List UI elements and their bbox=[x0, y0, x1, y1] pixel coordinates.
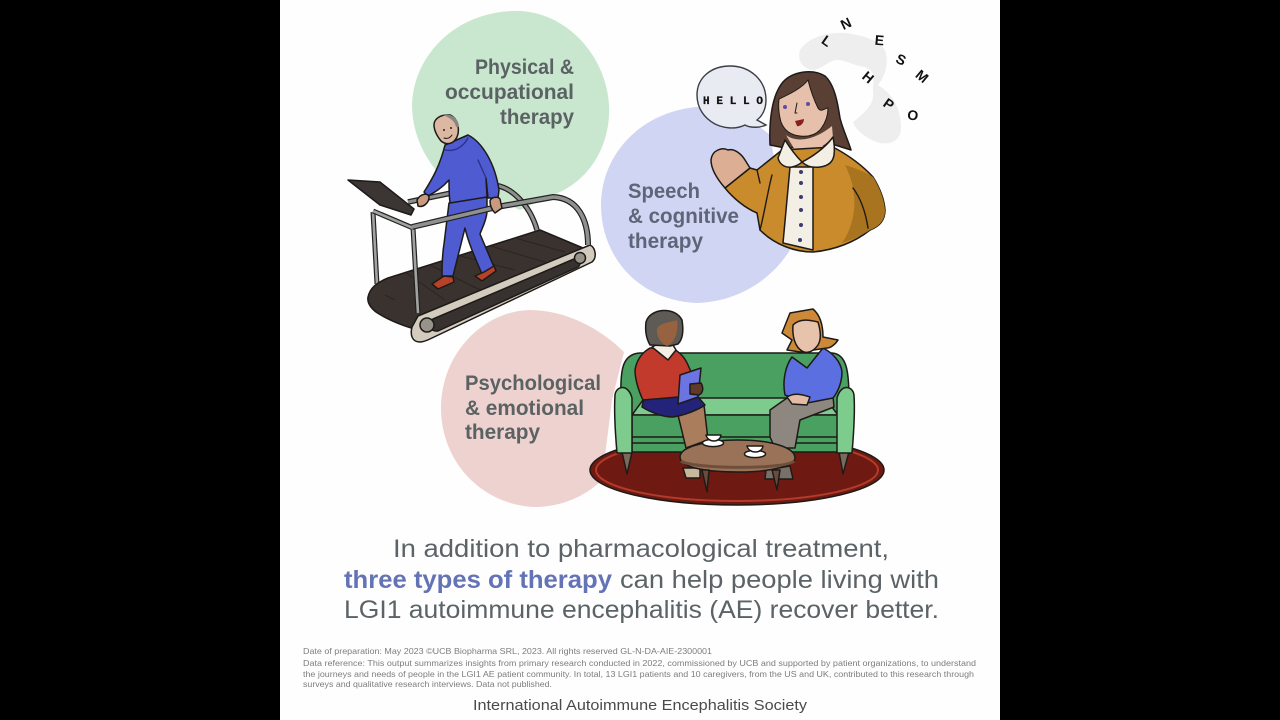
therapist sweater bbox=[635, 348, 697, 400]
treadmill far post bbox=[373, 212, 377, 284]
scattered letters bbox=[819, 14, 932, 124]
client face bbox=[793, 320, 820, 352]
blob: psychological therapy pink circle bbox=[441, 310, 624, 507]
sofa seat bbox=[632, 398, 838, 415]
scattered letters: P bbox=[880, 95, 897, 113]
illustration: therapy session on sofa bbox=[590, 309, 884, 505]
woman face bbox=[779, 80, 828, 136]
speech fog cloud bbox=[799, 33, 901, 143]
heading: psychological and emotional therapy: therapy bbox=[465, 421, 540, 444]
man left hand bbox=[417, 194, 429, 206]
treadmill near post and crossbar bbox=[373, 211, 418, 313]
treadmill side frame bbox=[411, 245, 595, 342]
scattered letters: N bbox=[838, 14, 854, 33]
woman buttons bbox=[798, 170, 803, 242]
therapist hand bbox=[690, 383, 703, 395]
treadmill belt bbox=[368, 230, 590, 330]
client legs bbox=[770, 396, 834, 448]
man right hand bbox=[490, 197, 502, 213]
treadmill far rail bbox=[408, 185, 537, 230]
sofa arms bbox=[615, 388, 632, 453]
rug bbox=[590, 435, 884, 505]
heading: speech and cognitive therapy: Speech bbox=[628, 180, 700, 203]
woman hair bbox=[770, 72, 851, 150]
heading: psychological and emotional therapy: & emotional bbox=[465, 397, 584, 420]
scattered letters: O bbox=[906, 106, 920, 124]
footnotes bbox=[303, 646, 976, 689]
scattered letters: H bbox=[859, 68, 877, 87]
heading: psychological and emotional therapy bbox=[465, 372, 601, 444]
man legs bbox=[442, 196, 494, 276]
woman eyes and mouth bbox=[783, 102, 810, 126]
main statement: three types of therapy bbox=[344, 566, 612, 594]
woman cardigan bbox=[725, 147, 885, 252]
heading: physical and occupational therapy: Physical & bbox=[475, 56, 574, 79]
man hoodie bbox=[424, 135, 499, 203]
client feet bbox=[765, 466, 793, 479]
treadmill console bbox=[348, 180, 414, 215]
heading: physical and occupational therapy: occupational bbox=[445, 81, 574, 104]
therapist skirt bbox=[642, 390, 705, 417]
man shoes bbox=[432, 276, 454, 289]
treadmill rollers bbox=[420, 318, 434, 332]
footnotes: Data reference: This output summarizes insights from primary research conducted in 2022, commissioned by UCB and supported by patient organizations, to understand bbox=[303, 658, 976, 668]
sofa legs bbox=[622, 452, 849, 474]
blob: speech therapy lilac circle bbox=[601, 107, 790, 303]
clipboard bbox=[678, 368, 701, 404]
woman collar bbox=[778, 137, 834, 167]
therapist head bbox=[646, 310, 683, 346]
scattered letters: S bbox=[893, 50, 909, 69]
therapist shirt collar bbox=[652, 345, 676, 360]
illustration: woman speaking with word fog bbox=[697, 14, 932, 252]
client sweater bbox=[784, 348, 842, 403]
blob: physical therapy green circle bbox=[412, 11, 609, 210]
speech bubble HELLO bbox=[697, 66, 766, 128]
heading: speech and cognitive therapy bbox=[628, 180, 739, 253]
white content panel bbox=[280, 0, 1000, 720]
heading: psychological and emotional therapy: Psychological bbox=[465, 372, 601, 395]
heading: physical and occupational therapy bbox=[445, 56, 574, 129]
scattered letters: E bbox=[874, 32, 885, 48]
woman blouse bbox=[783, 167, 813, 250]
heading: physical and occupational therapy: therapy bbox=[500, 106, 574, 129]
illustration: man walking on treadmill bbox=[348, 115, 595, 342]
coffee table bbox=[680, 440, 795, 472]
woman hand bbox=[711, 149, 750, 188]
coffee cups bbox=[702, 439, 724, 447]
treadmill near rail bbox=[412, 197, 588, 245]
heading: speech and cognitive therapy: & cognitive bbox=[628, 205, 739, 228]
main statement: LGI1 autoimmune encephalitis (AE) recover better. bbox=[344, 596, 939, 624]
scattered letters: L bbox=[819, 32, 835, 50]
main statement: can help people living with bbox=[620, 566, 939, 594]
main statement: In addition to pharmacological treatment, bbox=[393, 535, 889, 563]
therapist legs bbox=[678, 405, 708, 448]
therapist shoes bbox=[683, 468, 700, 478]
main statement bbox=[344, 535, 939, 624]
footnotes: Date of preparation: May 2023 ©UCB Biopharma SRL, 2023. All rights reserved GL-N-DA-AIE-2300001 bbox=[303, 646, 712, 656]
man head bbox=[434, 115, 458, 144]
organization credit: International Autoimmune Encephalitis Society bbox=[473, 697, 808, 714]
heading: speech and cognitive therapy: therapy bbox=[628, 230, 703, 253]
woman neck bbox=[786, 126, 833, 162]
client hands bbox=[787, 394, 810, 405]
speech bubble HELLO: HELLO bbox=[703, 96, 763, 108]
sofa back bbox=[621, 353, 849, 440]
footnotes: surveys and qualitative research interviews. Data not published. bbox=[303, 679, 552, 689]
footnotes: the journeys and needs of people in the LGI1 AE patient community. In total, 13 LGI1 patients and 10 caregivers, from the US and UK, contributed to this research through bbox=[303, 669, 974, 679]
scattered letters: M bbox=[913, 66, 932, 86]
client hair bbox=[782, 309, 838, 352]
